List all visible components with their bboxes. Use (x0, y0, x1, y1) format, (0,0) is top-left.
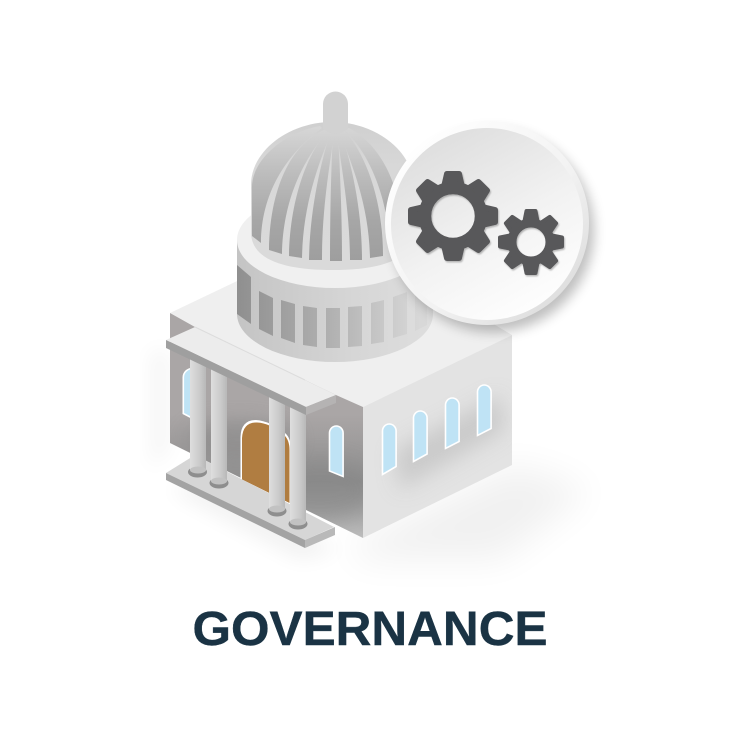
windows: right wall (382, 385, 491, 474)
drum (237, 240, 433, 362)
porch base (166, 455, 335, 548)
window: left wall (330, 426, 343, 476)
building: main block (170, 281, 512, 538)
left wall (170, 313, 375, 538)
icon: large gear (411, 174, 495, 258)
window: far left (183, 368, 192, 418)
ground shadow (150, 350, 590, 560)
title: GOVERNANCE (192, 603, 548, 656)
porch roof (166, 327, 336, 415)
badge: gears (385, 121, 594, 332)
right wall (363, 335, 512, 538)
drum windows (237, 265, 427, 348)
dome body (251, 122, 414, 270)
dome ribs (252, 126, 404, 261)
columns (188, 358, 308, 530)
infographic: governance icon (166, 92, 600, 646)
dome structure (237, 92, 433, 362)
finial (323, 92, 348, 133)
drum top ledge (237, 192, 433, 288)
door (240, 420, 291, 504)
roof (170, 232, 512, 407)
icon: small gear (500, 211, 562, 273)
